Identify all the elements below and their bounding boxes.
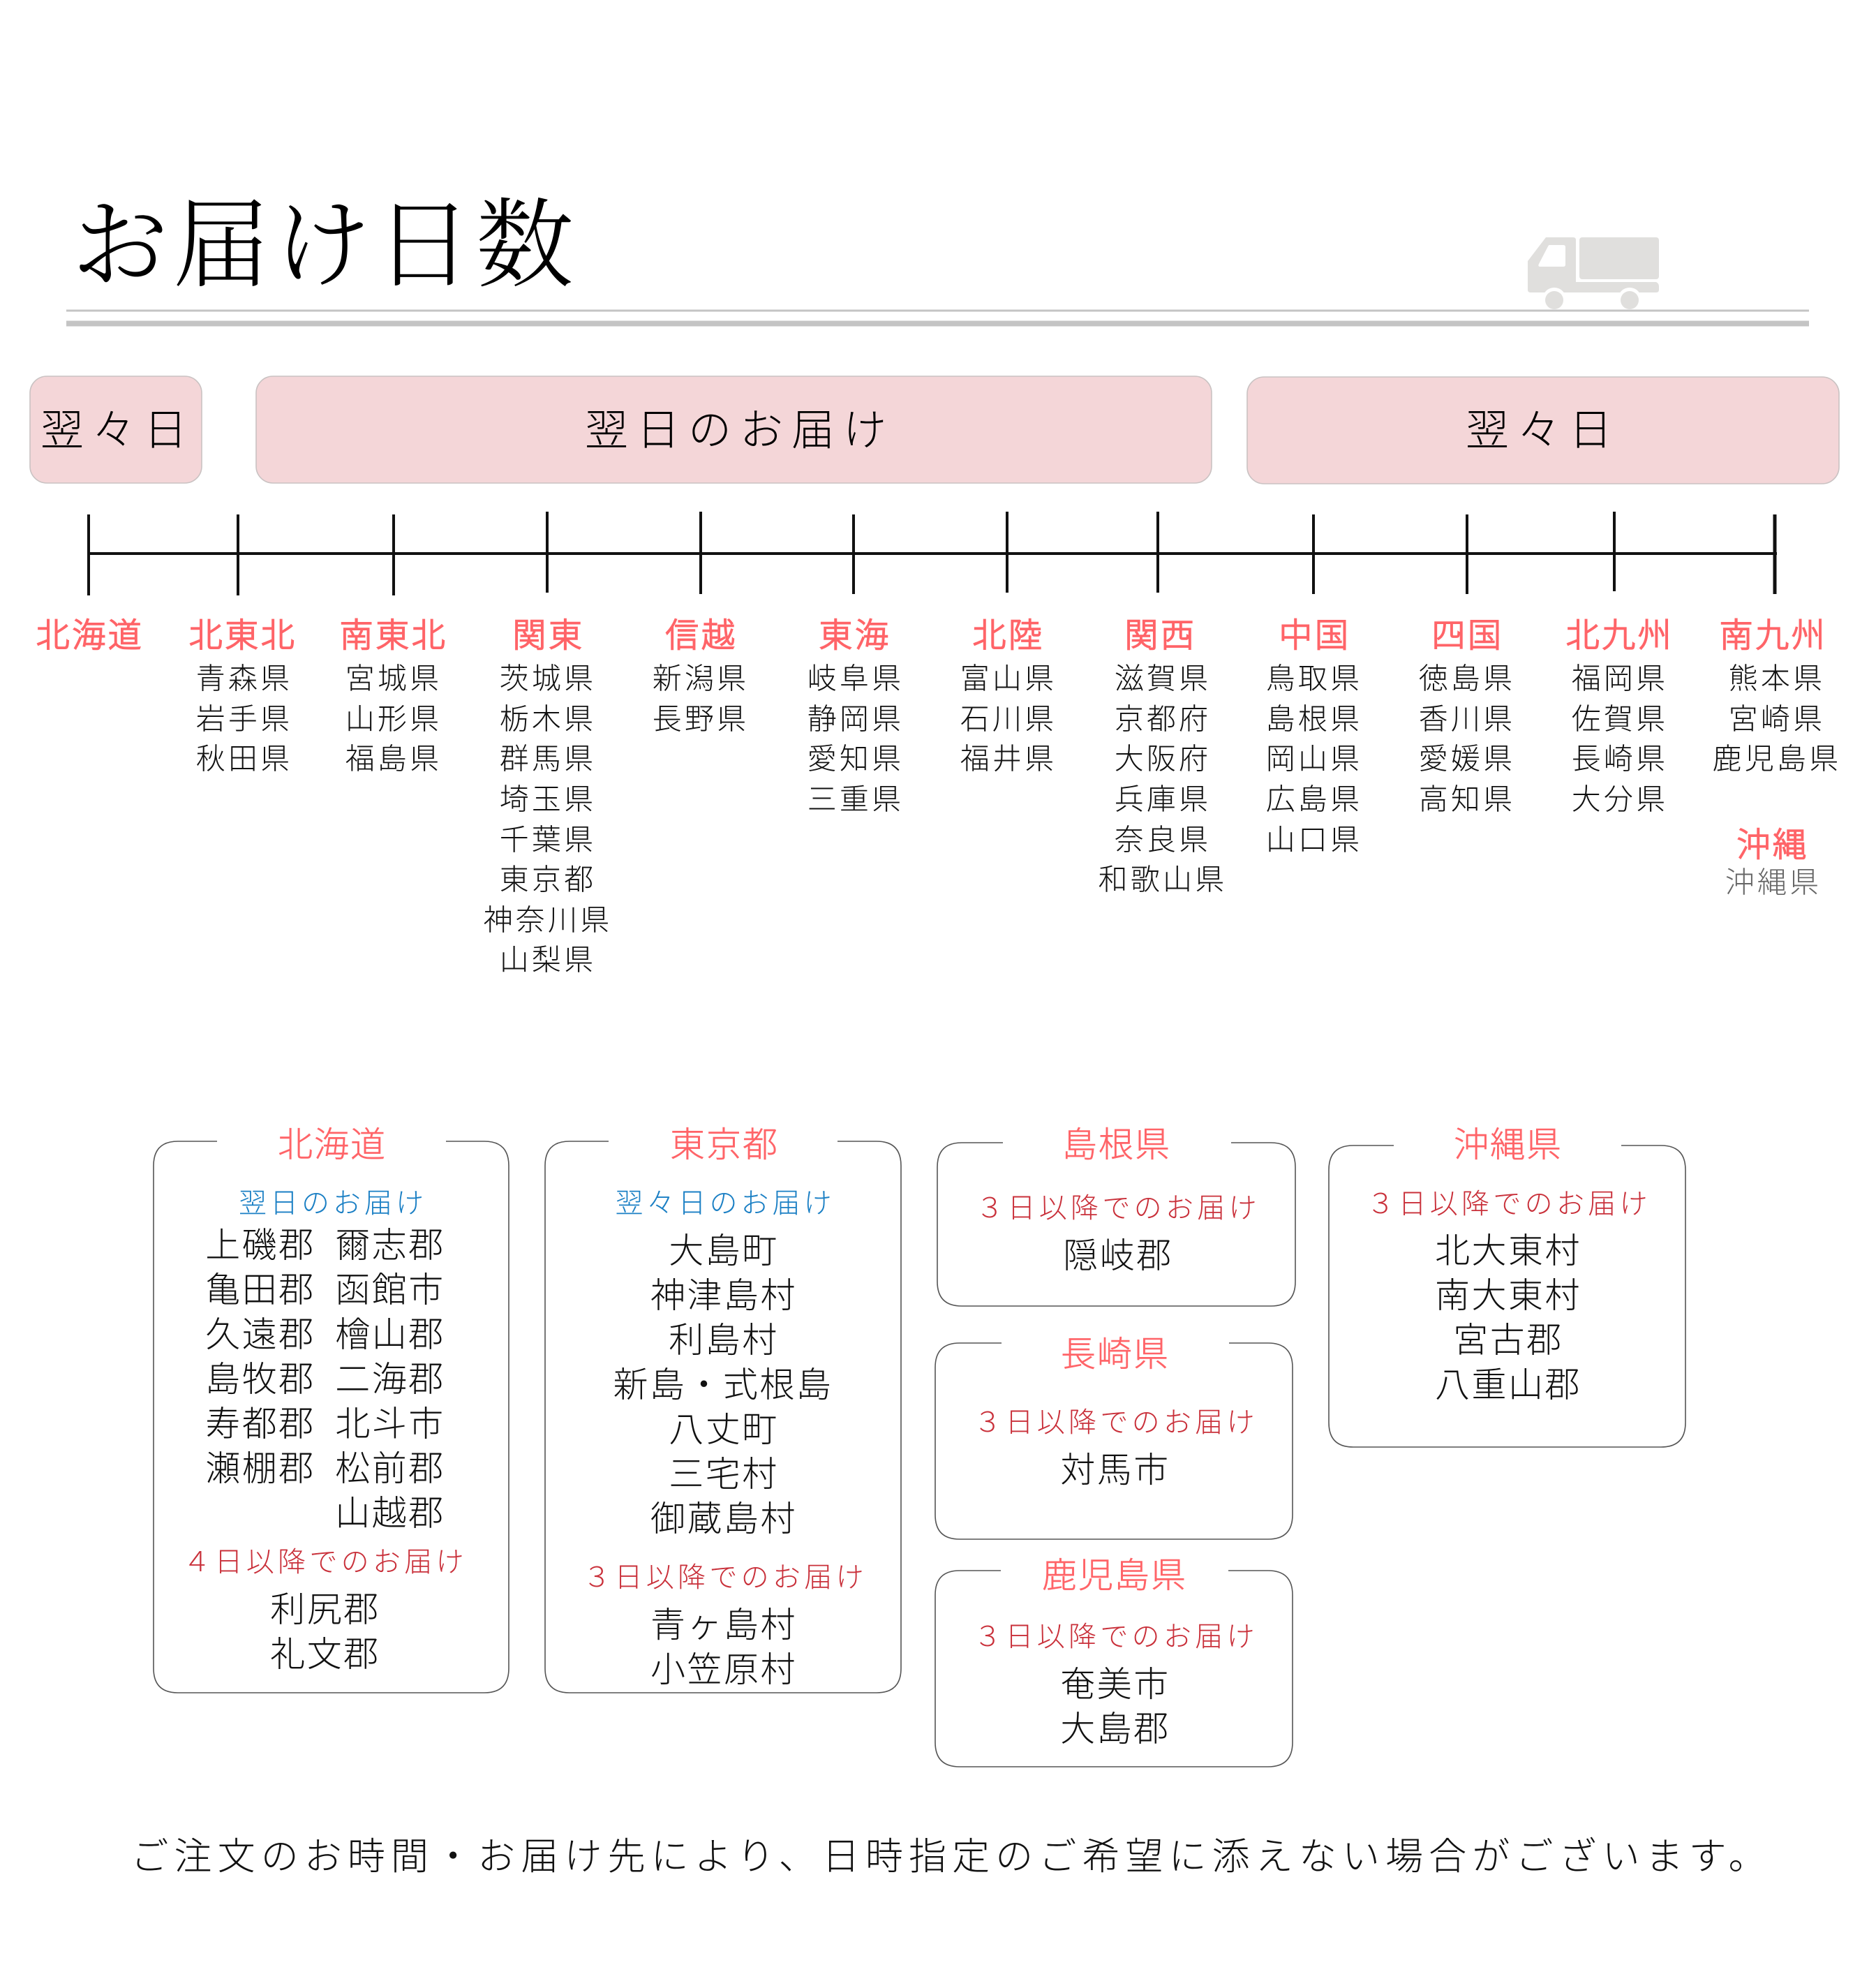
region: 中国 — [1266, 617, 1362, 856]
region: 関西: 和歌山県 — [1099, 863, 1227, 896]
panel: 沖縄県 exceptions: ３日以降でのお届け — [1367, 1189, 1651, 1219]
region: 南東北: 山形県 — [345, 702, 442, 736]
region: 北東北 — [189, 617, 297, 775]
region: 南東北: 福島県 — [345, 743, 442, 775]
panel: 島根県 exceptions: 隠岐郡 — [1063, 1236, 1173, 1275]
panel: 北海道 exceptions: 山越郡 — [335, 1494, 445, 1533]
panel: 島根県 exceptions — [937, 1125, 1295, 1306]
panel: 北海道 exceptions: 二海郡 — [335, 1360, 445, 1399]
panel: 鹿児島県 exceptions: 大島郡 — [1060, 1710, 1170, 1749]
region: 南九州: 宮崎県 — [1729, 702, 1825, 736]
region: 関東 — [484, 617, 612, 976]
panel: 沖縄県 exceptions: 沖縄県 — [1454, 1125, 1563, 1164]
region: 関東: 千葉県 — [500, 824, 596, 856]
panel: 島根県 exceptions: ３日以降でのお届け — [976, 1193, 1260, 1224]
timeline — [89, 512, 1777, 595]
region: 東海: 岐阜県 — [807, 662, 904, 695]
panel: 長崎県 exceptions: 長崎県 — [1061, 1335, 1170, 1374]
panel: 東京都 exceptions: 青ヶ島村 — [650, 1606, 797, 1645]
panel: 島根県 exceptions: 島根県 — [1062, 1125, 1171, 1164]
region: 関西: 大阪府 — [1115, 743, 1211, 775]
region: 北陸: 石川県 — [960, 702, 1057, 736]
band: next-next-day east: 翌々日 — [1466, 406, 1621, 455]
panel: 鹿児島県 exceptions — [935, 1556, 1293, 1767]
region: 南九州: 鹿児島県 — [1713, 743, 1841, 775]
region: 東海 — [807, 617, 904, 815]
title rule — [66, 310, 1809, 327]
region: 四国: 高知県 — [1419, 783, 1515, 815]
panel: 北海道 exceptions: 利尻郡 — [270, 1590, 380, 1629]
region: 北東北: 秋田県 — [196, 743, 292, 775]
region: 北陸: 福井県 — [960, 743, 1057, 775]
panel: 北海道 exceptions: 松前郡 — [335, 1449, 445, 1488]
region: 東海: 東海 — [819, 617, 891, 655]
region: 南東北: 宮城県 — [345, 662, 442, 695]
panel: 鹿児島県 exceptions: 奄美市 — [1060, 1665, 1170, 1704]
icon: delivery truck — [1528, 237, 1659, 311]
region: 沖縄 — [1725, 826, 1822, 899]
region: 関東: 東京都 — [500, 863, 596, 896]
panel: 北海道 exceptions: 上磯郡 — [205, 1226, 315, 1265]
region: 関東: 埼玉県 — [500, 783, 596, 815]
region: 中国: 島根県 — [1266, 702, 1362, 736]
panel: 東京都 exceptions: 八丈町 — [669, 1410, 779, 1449]
panel: 北海道 exceptions: 島牧郡 — [205, 1360, 315, 1399]
panel: 沖縄県 exceptions: 南大東村 — [1435, 1276, 1581, 1315]
title: お届け日数 — [71, 193, 577, 300]
region: 北陸 — [960, 617, 1057, 775]
region: 関東: 神奈川県 — [484, 903, 612, 937]
panel: 北海道 exceptions: 翌日のお届け — [239, 1188, 427, 1219]
panel: 東京都 exceptions — [545, 1125, 901, 1693]
region: 沖縄: 沖縄 — [1736, 826, 1809, 864]
panel: 北海道 exceptions: 瀬棚郡 — [205, 1449, 315, 1488]
region: 北東北: 北東北 — [189, 617, 297, 655]
region: 関東: 茨城県 — [500, 662, 596, 695]
region: 北陸: 北陸 — [972, 617, 1045, 655]
region: 北九州: 北九州 — [1566, 617, 1674, 655]
region: 北九州: 福岡県 — [1572, 662, 1668, 695]
band: next-day delivery: 翌日のお届け — [585, 406, 895, 455]
panel: 北海道 exceptions — [154, 1125, 509, 1693]
region: 関西 — [1099, 617, 1227, 896]
band: next-next-day east — [1247, 377, 1839, 484]
region: 北九州: 大分県 — [1572, 783, 1668, 815]
region: 信越: 新潟県 — [653, 662, 749, 695]
region: 北東北: 青森県 — [196, 662, 292, 695]
panel: 北海道 exceptions: 亀田郡 — [205, 1270, 315, 1310]
region: 関西: 滋賀県 — [1115, 662, 1211, 695]
panel: 北海道 exceptions: ４日以降でのお届け — [183, 1547, 468, 1578]
panel: 東京都 exceptions: 東京都 — [670, 1125, 779, 1164]
region: 東海: 静岡県 — [807, 702, 904, 736]
panel: 鹿児島県 exceptions: ３日以降でのお届け — [974, 1622, 1258, 1652]
panel: 東京都 exceptions: 新島・式根島 — [613, 1365, 833, 1404]
panel: 東京都 exceptions: 大島町 — [669, 1231, 779, 1270]
region: 南九州: 熊本県 — [1729, 662, 1825, 695]
region: 信越 — [653, 617, 749, 736]
panel: 北海道 exceptions: 爾志郡 — [335, 1226, 445, 1265]
region: 四国: 愛媛県 — [1419, 743, 1515, 775]
panel: 北海道 exceptions: 函館市 — [335, 1270, 445, 1310]
region: 四国: 徳島県 — [1419, 662, 1515, 695]
region: 北九州: 長崎県 — [1572, 743, 1668, 775]
panel: 長崎県 exceptions: 対馬市 — [1060, 1451, 1170, 1490]
panel: 北海道 exceptions: 久遠郡 — [205, 1315, 315, 1354]
panel: 東京都 exceptions: 神津島村 — [650, 1276, 797, 1315]
region: 北九州: 佐賀県 — [1572, 702, 1668, 736]
region: 関東: 栃木県 — [500, 702, 596, 736]
region: 中国: 中国 — [1279, 617, 1351, 655]
panel: 北海道 exceptions: 礼文郡 — [270, 1635, 380, 1674]
panel: 東京都 exceptions: 御蔵島村 — [650, 1499, 797, 1538]
panel: 沖縄県 exceptions: 北大東村 — [1435, 1231, 1581, 1270]
region: 中国: 岡山県 — [1266, 743, 1362, 775]
panel: 北海道 exceptions: 寿都郡 — [205, 1404, 315, 1444]
region: 東海: 愛知県 — [807, 743, 904, 775]
region: 関東: 関東 — [512, 617, 585, 655]
panel: 沖縄県 exceptions: 八重山郡 — [1435, 1365, 1581, 1404]
panel: 東京都 exceptions: 利島村 — [669, 1321, 779, 1360]
panel: 長崎県 exceptions — [935, 1335, 1293, 1539]
region: 南九州 — [1713, 617, 1841, 775]
region: 沖縄: 沖縄県 — [1725, 866, 1822, 899]
panel: 東京都 exceptions: 翌々日のお届け — [616, 1188, 835, 1219]
region: 関西: 奈良県 — [1115, 824, 1211, 856]
region: 関西: 兵庫県 — [1115, 783, 1211, 815]
region: 四国: 四国 — [1431, 617, 1504, 655]
footer note: ご注文のお時間・お届け先により、日時指定のご希望に添えない場合がございます。 — [131, 1836, 1772, 1878]
region: 関東: 群馬県 — [500, 743, 596, 775]
band: next-day delivery — [256, 376, 1212, 483]
region: 信越: 信越 — [665, 617, 738, 655]
panel: 鹿児島県 exceptions: 鹿児島県 — [1042, 1556, 1187, 1595]
band: next-next-day west — [30, 376, 202, 483]
region: 北東北: 岩手県 — [196, 702, 292, 736]
panel: 北海道 exceptions: 北斗市 — [335, 1404, 445, 1444]
region: 中国: 山口県 — [1266, 824, 1362, 856]
region: 関東: 山梨県 — [500, 944, 596, 976]
region: 北海道: 北海道 — [36, 617, 144, 655]
panel: 北海道 exceptions: 北海道 — [278, 1125, 387, 1164]
panel: 東京都 exceptions: ３日以降でのお届け — [583, 1562, 868, 1593]
region: 北九州 — [1566, 617, 1674, 815]
region: 南九州: 南九州 — [1720, 617, 1827, 655]
region: 関西: 京都府 — [1115, 702, 1211, 736]
panel: 沖縄県 exceptions: 宮古郡 — [1453, 1321, 1563, 1360]
region: 信越: 長野県 — [653, 702, 749, 736]
region: 四国 — [1419, 617, 1515, 815]
panel: 沖縄県 exceptions — [1329, 1125, 1685, 1447]
region: 中国: 広島県 — [1266, 783, 1362, 815]
region: 東海: 三重県 — [807, 783, 904, 815]
region: 北陸: 富山県 — [960, 662, 1057, 695]
panel: 東京都 exceptions: 三宅村 — [669, 1455, 779, 1494]
region: 南東北: 南東北 — [340, 617, 447, 655]
region: 南東北 — [340, 617, 447, 775]
panel: 東京都 exceptions: 小笠原村 — [650, 1650, 797, 1689]
region: 関西: 関西 — [1124, 617, 1197, 655]
region: 四国: 香川県 — [1419, 702, 1515, 736]
panel: 北海道 exceptions: 檜山郡 — [335, 1315, 445, 1354]
region: 中国: 鳥取県 — [1266, 662, 1362, 695]
band: next-next-day west: 翌々日 — [40, 406, 195, 455]
panel: 長崎県 exceptions: ３日以降でのお届け — [974, 1407, 1258, 1438]
